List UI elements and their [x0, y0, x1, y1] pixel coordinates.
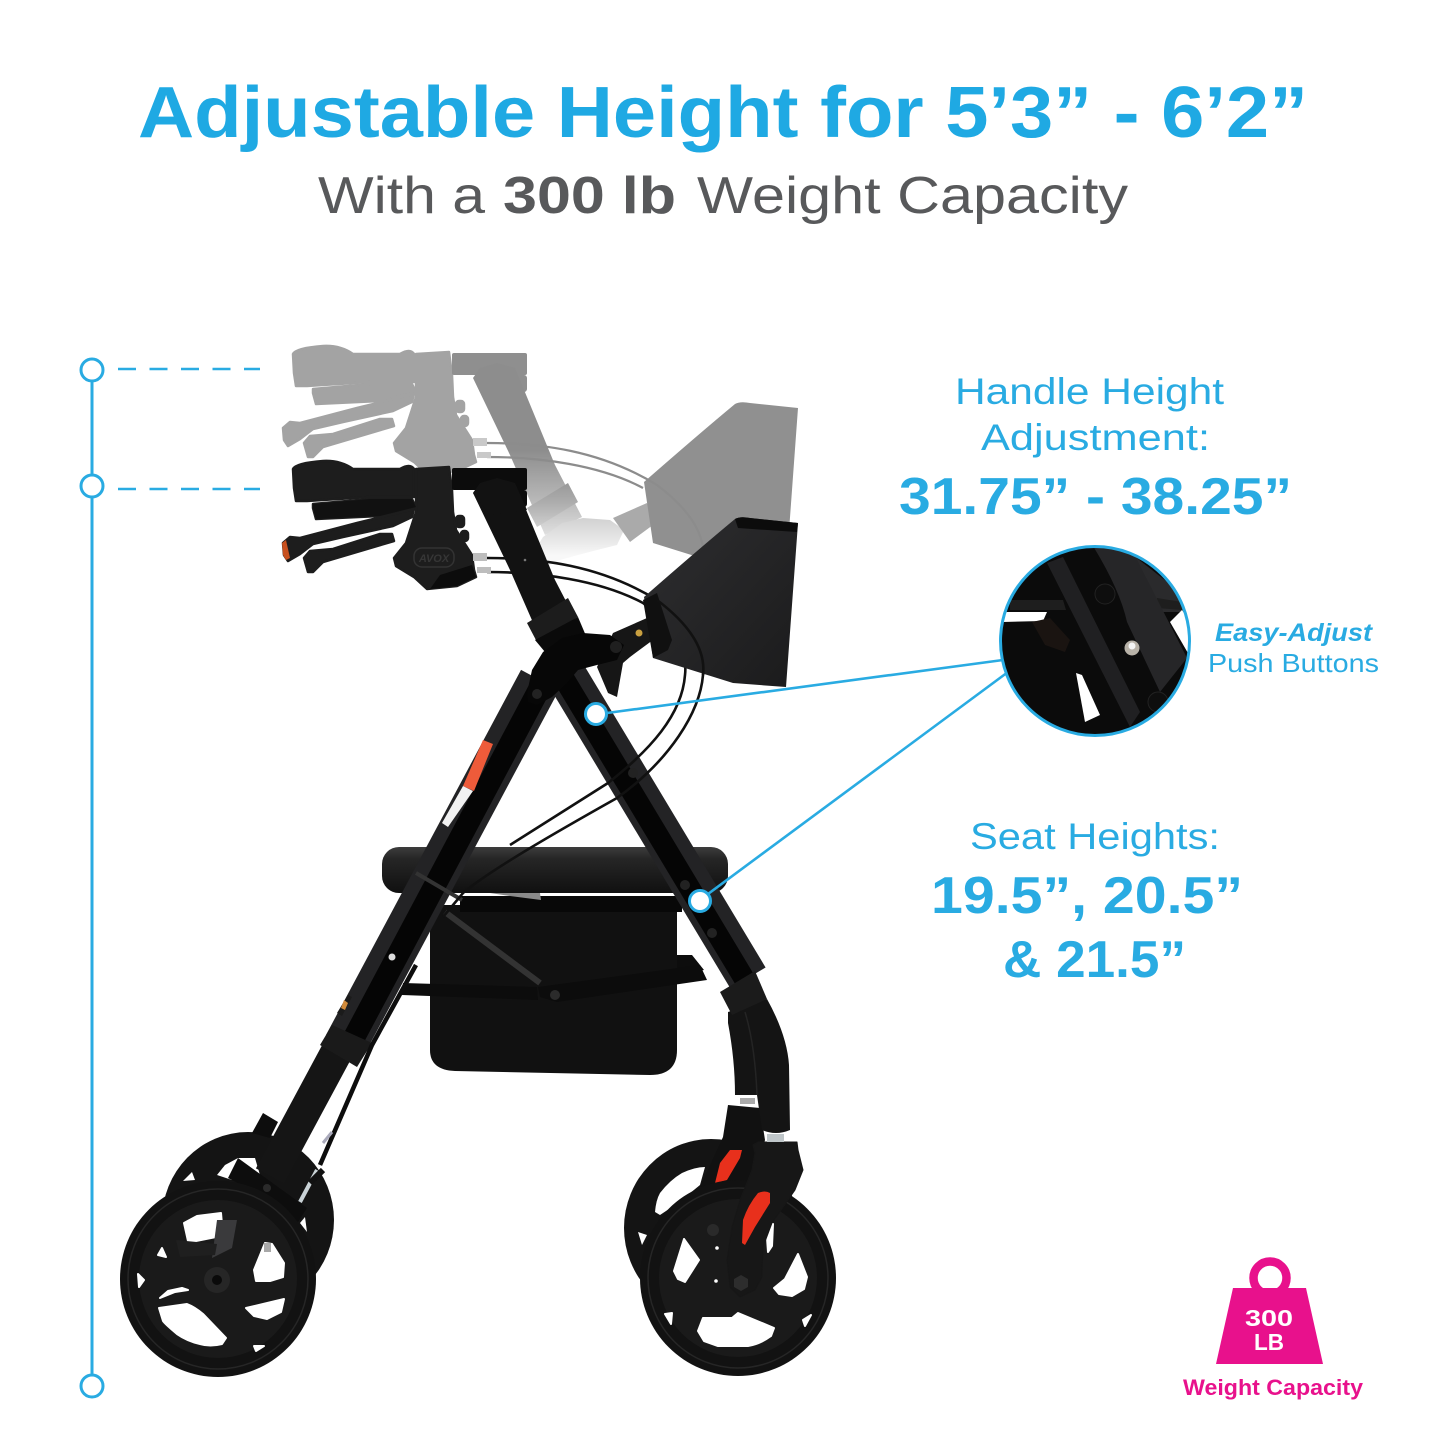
height scale with dashed markers [81, 359, 260, 1397]
cables [443, 558, 703, 917]
subtitle: Weight Capacity [697, 167, 1128, 225]
text block: handle height adjustment: Handle Height [955, 371, 1225, 412]
frame cross bars [402, 912, 707, 1002]
wheel, front right [640, 1180, 836, 1376]
callout dot: upper push button [586, 704, 606, 724]
text block: easy-adjust push buttons: Easy-Adjust [1215, 619, 1374, 647]
rear leg tube [270, 680, 543, 1176]
shopping basket [430, 905, 677, 1075]
subtitle [318, 167, 1128, 225]
text block: seat heights: Seat Heights: [970, 816, 1220, 857]
active handle with brake levers [282, 461, 527, 589]
text block: easy-adjust push buttons [1208, 619, 1379, 678]
walker: faded raised handle position [283, 346, 798, 578]
wheel, front left [120, 1181, 316, 1377]
front fork with red reflector [727, 1134, 803, 1297]
text block: handle height adjustment: 31.75” - 38.25” [899, 468, 1292, 526]
text block: seat heights: & 21.5” [1003, 931, 1186, 989]
callout dot: lower push button [690, 890, 710, 912]
text block: easy-adjust push buttons: Push Buttons [1208, 648, 1379, 678]
inset photo: push button close-up [1000, 546, 1192, 736]
frame piece beside basket [677, 955, 704, 975]
icon: 300 lb weight capacity: 300 [1245, 1305, 1293, 1331]
text block: seat heights: 19.5”, 20.5” [931, 867, 1243, 925]
rear fork, right [700, 1098, 765, 1187]
backrest [643, 517, 798, 687]
rear wheel, back left [162, 1132, 334, 1308]
rear leg bracket and brake fittings [228, 1113, 332, 1222]
icon: 300 lb weight capacity: Weight Capacity [1183, 1375, 1364, 1400]
callout leader lines [607, 660, 1008, 894]
upper handle tube and collar [473, 478, 592, 670]
seat [382, 847, 728, 912]
icon: 300 lb weight capacity [1183, 1262, 1364, 1400]
text block: handle height adjustment [899, 371, 1292, 526]
active handle with brake levers: AVOX [418, 553, 450, 565]
text block: handle height adjustment: Adjustment: [981, 417, 1210, 458]
folding hinge plate and backrest arm [527, 618, 657, 705]
rear wheel, back right [624, 1139, 798, 1317]
subtitle: With a [318, 167, 485, 225]
title: Adjustable Height for 5’3” - 6’2” [138, 73, 1308, 153]
icon: 300 lb weight capacity: LB [1254, 1329, 1284, 1355]
subtitle: 300 lb [503, 167, 676, 225]
text block: seat heights [931, 816, 1243, 989]
front leg tube with curved lower section [557, 665, 790, 1133]
